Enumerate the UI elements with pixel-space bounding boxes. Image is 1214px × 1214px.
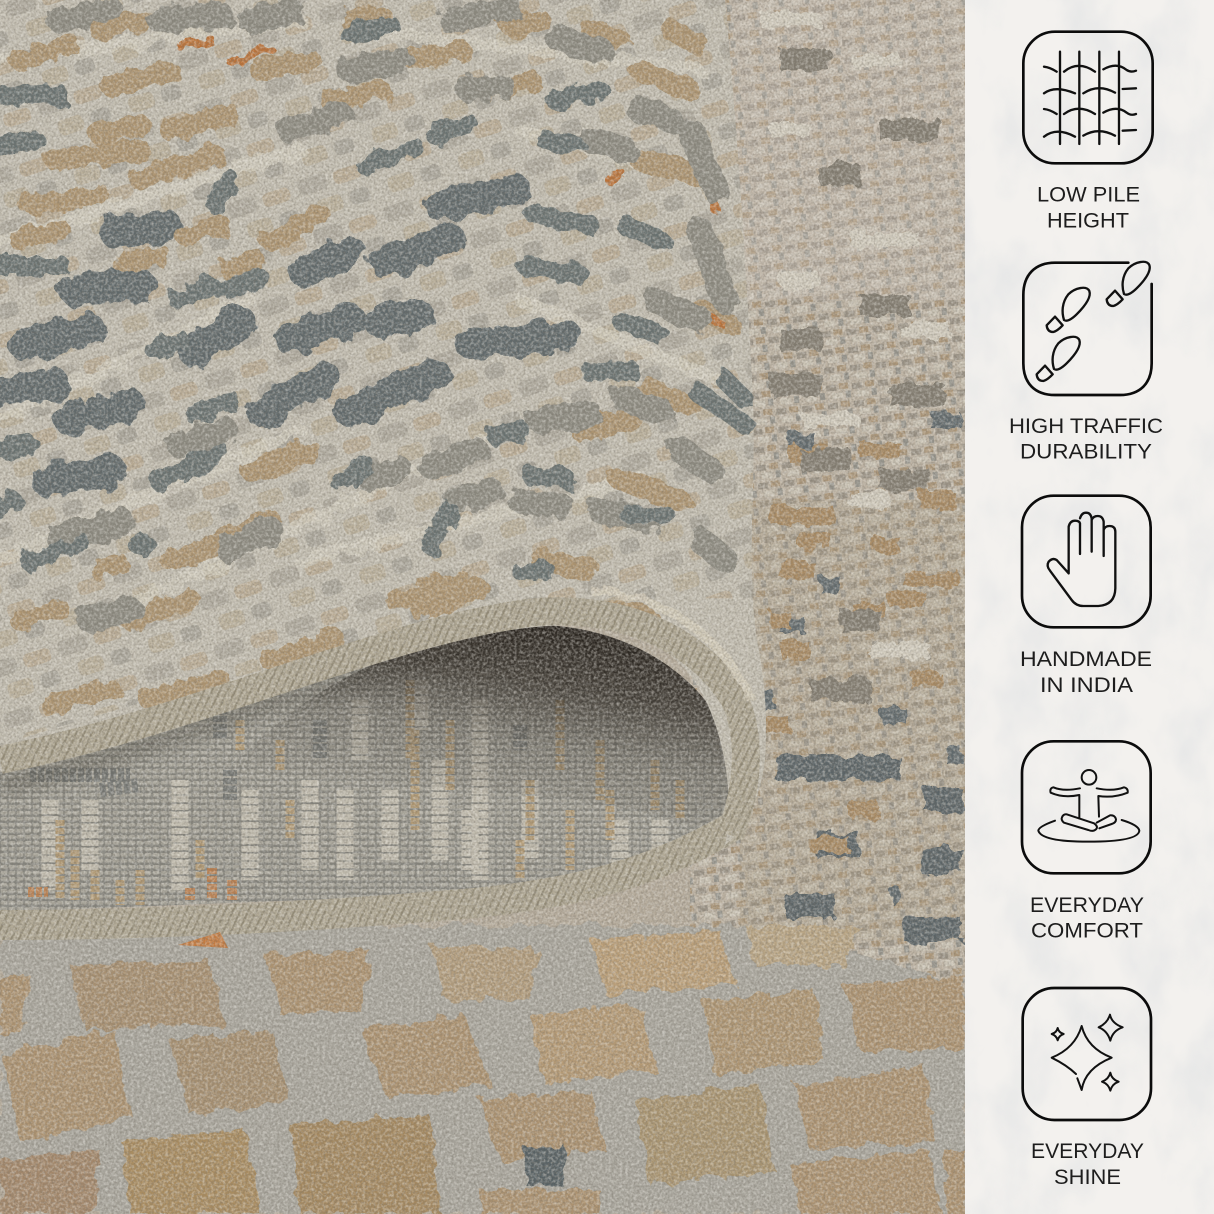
feature: high traffic durability [1009, 262, 1163, 464]
label [1031, 1140, 1144, 1189]
panel: features column [965, 0, 1214, 1214]
floor rug: lower tan diamond pattern [0, 925, 965, 1214]
underside tan and orange stitches [28, 680, 680, 905]
orange stitch peeking under edge [178, 932, 228, 948]
fabric grain overlay [0, 0, 965, 1214]
label: HIGH TRAFFIC [1009, 415, 1163, 438]
label: SHINE [1054, 1166, 1121, 1189]
label: HEIGHT [1047, 210, 1129, 232]
rolled-over rug face [0, 0, 766, 845]
label [1037, 184, 1140, 232]
mid grey blotches [60, 10, 725, 620]
lower binding edge [0, 825, 735, 925]
icon: woven pile [1023, 32, 1153, 163]
label: EVERYDAY [1031, 1140, 1144, 1163]
floor rug: upper right woven texture [690, 0, 980, 1010]
label: EVERYDAY [1030, 894, 1144, 917]
icon: sparkles [1023, 988, 1151, 1120]
dark shadow inside the roll [230, 625, 735, 840]
label [1020, 648, 1152, 697]
label [1030, 894, 1144, 942]
feature: everyday shine [1023, 988, 1151, 1189]
label: HANDMADE [1020, 648, 1152, 671]
highlight on fold shoulder [590, 590, 752, 700]
label [1009, 415, 1163, 464]
pebble texture across rug face [0, 0, 757, 745]
label: LOW PILE [1037, 184, 1140, 206]
shadow under the fold lip [0, 640, 535, 785]
top fold binding edge [0, 611, 746, 835]
label: DURABILITY [1020, 440, 1152, 464]
slate grey blotches [2, 190, 565, 482]
orange accents [180, 15, 718, 322]
rug face pattern of blotches [0, 10, 745, 705]
label: IN INDIA [1040, 674, 1133, 697]
rug underside with visible weave [0, 625, 735, 912]
light lattice wash [0, 20, 720, 600]
feature: everyday comfort [1022, 741, 1151, 942]
feature: low pile height [1023, 32, 1153, 232]
label: COMFORT [1031, 920, 1143, 942]
icon: seated meditation figure [1022, 741, 1151, 873]
icon: footprints [1023, 262, 1152, 395]
icon: hand [1022, 496, 1151, 627]
tan blotches [20, 15, 730, 705]
feature: handmade in india [1020, 496, 1152, 697]
